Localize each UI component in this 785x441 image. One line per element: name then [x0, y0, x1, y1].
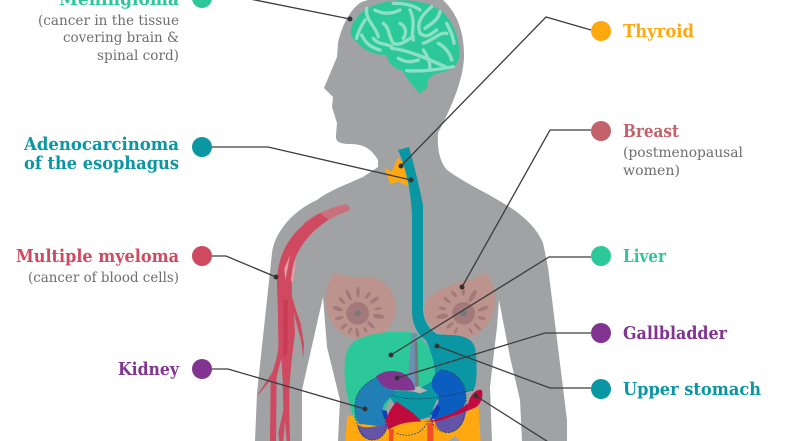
label: thyroid [591, 21, 694, 42]
adrenal [382, 405, 441, 421]
label: meningioma: (cancer in the tissue [38, 13, 179, 29]
label: adenocarcinoma: of the esophagus [24, 153, 179, 174]
esophagus [398, 147, 440, 340]
label: liver: Liver [623, 246, 666, 267]
label: thyroid: Thyroid [623, 21, 694, 42]
left kidney [355, 378, 397, 427]
brain [351, 0, 459, 93]
label: multiple myeloma [16, 246, 212, 286]
label: liver [591, 246, 666, 267]
breasts [325, 273, 495, 339]
label: breast: Breast [623, 121, 680, 142]
right kidney [430, 370, 466, 420]
thyroid [385, 157, 409, 187]
gallbladder [376, 371, 415, 391]
label: breast: women) [623, 163, 680, 179]
label: adenocarcinoma [23, 134, 212, 174]
blood vessels: multiple myeloma [257, 204, 350, 441]
label: gallbladder [591, 323, 727, 344]
label: meningioma [38, 0, 212, 64]
pancreas tip [410, 386, 427, 393]
pelvis orange [345, 403, 481, 441]
label: breast: (postmenopausal [623, 145, 743, 161]
duct [408, 333, 418, 387]
human body silhouette [255, 0, 567, 441]
label: multiple myeloma: Multiple myeloma [16, 246, 179, 267]
label: gallbladder: Gallbladder [623, 323, 727, 344]
stomach [390, 332, 477, 422]
label: adenocarcinoma: Adenocarcinoma [23, 134, 179, 155]
abdominal organs [345, 332, 482, 441]
label: multiple myeloma: (cancer of blood cells) [28, 270, 179, 286]
dashed outlines [355, 370, 473, 440]
label: upper stomach: Upper stomach [623, 379, 761, 400]
label: meningioma: spinal cord) [97, 48, 179, 64]
liver [345, 332, 435, 420]
label: breast [591, 121, 743, 179]
pancreas / red organ [386, 390, 482, 430]
iliac vessels [389, 423, 433, 441]
label: meningioma: covering brain & [63, 30, 179, 46]
connector lines [212, 0, 591, 441]
connector end points [274, 16, 478, 412]
label: kidney: Kidney [118, 359, 179, 380]
